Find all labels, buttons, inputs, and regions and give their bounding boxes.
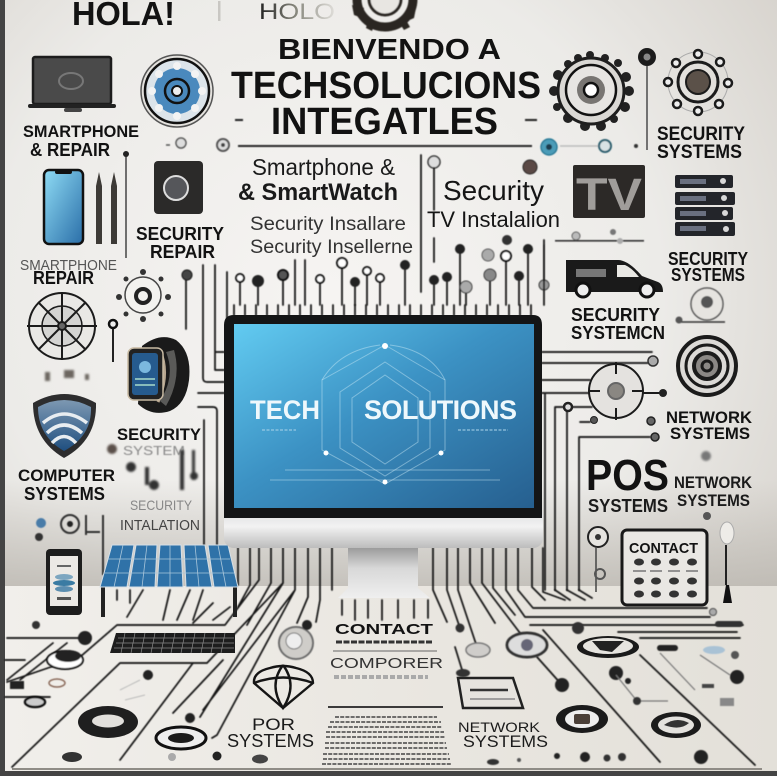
- blurred parts cluster: [107, 444, 198, 490]
- label: security systemcn: SECURITY: [571, 305, 660, 325]
- services subheading: smartphone: Security Insellerne: [250, 237, 413, 258]
- label: network systems first: NETWORK: [666, 408, 753, 427]
- label: network systems second: NETWORK: [674, 473, 753, 492]
- services subheading: security TV: Security: [443, 175, 544, 206]
- label: security system: SYSTEM: [123, 443, 185, 458]
- label: smartphone and repair: [23, 122, 139, 160]
- icon: camera gear: [676, 288, 725, 324]
- floor small details right: [487, 608, 744, 765]
- screen emblem: [270, 343, 500, 484]
- title: BIENVENDO A: [278, 34, 501, 66]
- title: INTEGATLES: [271, 101, 498, 143]
- blurred connector icons: [35, 515, 103, 575]
- icon: oval ring top centre: [279, 620, 313, 659]
- label: security systems second: SYSTEMS: [671, 265, 745, 285]
- label: security repair: SECURITY: [136, 224, 224, 244]
- label: security systems top right: SYSTEMS: [657, 142, 742, 163]
- label: por systems: SYSTEMS: [227, 731, 314, 751]
- label: network systems first: SYSTEMS: [670, 424, 750, 443]
- label: security systems second: SECURITY: [668, 249, 748, 269]
- label: security system: [117, 425, 202, 458]
- label: security systems top right: SECURITY: [657, 124, 745, 145]
- pin row above monitor: [182, 155, 549, 305]
- label: network systems second: SYSTEMS: [677, 491, 750, 510]
- label: computer systems: [18, 466, 115, 504]
- label: POS systems: POS: [586, 451, 669, 500]
- label: contact block: CONTACT: [335, 621, 433, 638]
- services subheading: security TV: TV Instalalion: [427, 207, 560, 232]
- fine print paragraph: [322, 717, 452, 764]
- label: security system: SECURITY: [117, 425, 202, 444]
- label: security installation: [120, 497, 200, 534]
- floor ellipse buttons: [62, 706, 268, 764]
- label: security repair: [136, 224, 224, 262]
- label: computer systems: SYSTEMS: [24, 484, 105, 504]
- greeting: Hola: [72, 0, 335, 32]
- services subheading: smartphone: [238, 154, 413, 258]
- services subheading: smartphone: & SmartWatch: [238, 179, 398, 206]
- floor icons left: [10, 621, 195, 723]
- label: network systems second: [674, 473, 753, 510]
- title: [231, 34, 541, 143]
- icon: swirl disc: [678, 337, 736, 395]
- label: network systems first: [666, 408, 753, 443]
- icon: solar panel: [100, 545, 238, 617]
- label: smartphone and repair: SMARTPHONE: [23, 122, 139, 141]
- label: smartphone and repair: & REPAIR: [30, 140, 110, 160]
- title: TECHSOLUCIONS: [231, 65, 541, 107]
- icon: gear right: [549, 51, 634, 131]
- icon: parachute: [254, 665, 313, 708]
- icon: form document: [458, 678, 523, 708]
- monitor with screen: [224, 315, 543, 598]
- icon: shield: [33, 394, 96, 458]
- label: smartphone repair: REPAIR: [33, 268, 94, 288]
- label: network systems bottom: NETWORK: [458, 719, 541, 735]
- floor icons centre right: [456, 622, 584, 692]
- label: security systemcn: SYSTEMCN: [571, 323, 665, 343]
- monitor screen: [234, 324, 534, 508]
- monitor chin: [224, 505, 543, 548]
- label: POS systems: [586, 451, 669, 516]
- label: security systemcn: [571, 305, 665, 343]
- screen subtitle lines: [262, 429, 508, 431]
- blurred node: [701, 451, 711, 461]
- label: security installation: INTALATION: [120, 517, 200, 534]
- label: network systems bottom: SYSTEMS: [463, 732, 548, 751]
- label: por systems: [227, 715, 314, 751]
- label: contact block: [328, 621, 443, 707]
- icon: security dial: [664, 50, 732, 115]
- panel: contact keypad: CONTACT: [629, 540, 698, 557]
- icon: server bars: [675, 175, 735, 236]
- label: security systems top right: [657, 124, 745, 163]
- icon: pin: [109, 320, 117, 362]
- services subheading: smartphone: Smartphone &: [252, 154, 395, 180]
- icon: pin top right: [638, 48, 656, 150]
- circuit lines behind monitor: [186, 265, 652, 590]
- label: network systems bottom: [458, 719, 548, 751]
- icon: van: [566, 260, 663, 297]
- icon: blue gear: [141, 55, 213, 127]
- icon: small gear: [116, 269, 171, 322]
- diverging circuit lines on floor, left: [5, 548, 332, 767]
- diverging circuit lines on floor, right: [342, 548, 755, 765]
- panel: contact keypad: [622, 530, 707, 605]
- services subheading: smartphone: Security Insallare: [250, 214, 406, 235]
- label: POS systems: SYSTEMS: [588, 496, 668, 516]
- icon: top gear: [352, 0, 416, 31]
- monitor stand: [338, 548, 430, 598]
- icon: keyboard: [110, 633, 235, 653]
- icon: dark square button: [154, 161, 203, 214]
- label: security repair: REPAIR: [150, 242, 215, 262]
- small divider with beads: [555, 229, 644, 244]
- label: computer systems: COMPUTER: [18, 466, 115, 485]
- icon: small beads: [45, 370, 89, 381]
- icon: smartwatch: [128, 337, 189, 413]
- screen title: SOLUTIONS: [357, 395, 517, 425]
- label: smartphone repair: [20, 257, 117, 288]
- icon: node pin: [588, 512, 711, 592]
- icon: TV block: TV: [576, 169, 642, 220]
- icon: target gauge: [564, 356, 667, 441]
- icon: web globe: [27, 292, 97, 360]
- icon: microphone stand: [720, 522, 734, 603]
- label: contact block: COMPORER: [330, 655, 443, 672]
- label: por systems: POR: [252, 715, 295, 734]
- label: smartphone repair: SMARTPHONE: [20, 257, 117, 274]
- icon: smartphone with tools: [44, 151, 129, 258]
- services subheading: security TV: [427, 175, 560, 232]
- monitor bezel: [224, 315, 542, 518]
- screen title: TECH: [250, 395, 320, 425]
- icon: laptop: [28, 57, 116, 112]
- icon: small phone: [46, 549, 82, 615]
- label: security installation: SECURITY: [130, 497, 193, 513]
- title divider and beads: [166, 120, 638, 155]
- floor right ellipse buttons: [556, 636, 701, 738]
- label: security systems second: [668, 249, 748, 285]
